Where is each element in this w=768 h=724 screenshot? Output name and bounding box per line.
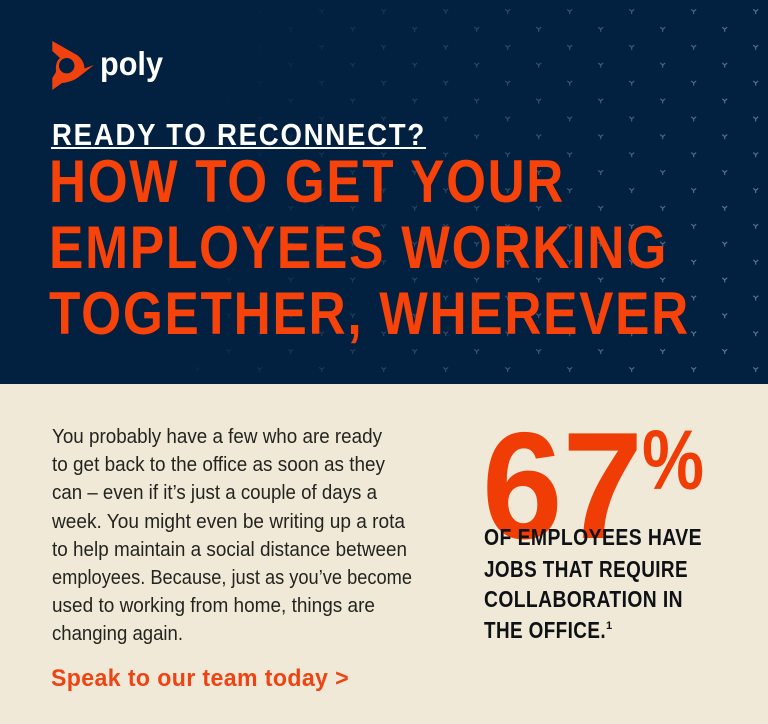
logo wordmark: poly bbox=[100, 45, 164, 82]
statistic: 67%: % bbox=[642, 413, 704, 507]
body paragraph: week. You might even be writing up a rota bbox=[51, 510, 406, 533]
body paragraph bbox=[51, 425, 412, 645]
logo: Poly bbox=[52, 41, 164, 90]
title bbox=[49, 148, 690, 347]
call to action link: Speak to our team today > bbox=[51, 665, 349, 692]
statistic caption: OF EMPLOYEES HAVE bbox=[484, 524, 702, 550]
panel: cream content area bbox=[0, 384, 768, 724]
body paragraph: can – even if it’s just a couple of days a bbox=[52, 481, 378, 504]
body paragraph: to get back to the office as soon as they bbox=[52, 453, 386, 476]
statistic caption: JOBS THAT REQUIRE bbox=[484, 556, 688, 582]
body paragraph: changing again. bbox=[52, 622, 183, 645]
statistic caption: THE OFFICE. bbox=[484, 617, 606, 643]
statistic caption: COLLABORATION IN bbox=[484, 586, 683, 612]
statistic caption bbox=[484, 524, 702, 643]
title: EMPLOYEES WORKING bbox=[49, 214, 668, 281]
body paragraph: used to working from home, things are bbox=[52, 594, 375, 617]
panel: dark navy header bbox=[0, 0, 768, 384]
subtitle: READY TO RECONNECT? bbox=[52, 117, 426, 152]
statistic caption: 1 bbox=[606, 620, 613, 632]
body paragraph: to help maintain a social distance between bbox=[52, 538, 407, 561]
body paragraph: employees. Because, just as you’ve become bbox=[52, 566, 412, 589]
title: HOW TO GET YOUR bbox=[49, 148, 565, 215]
body paragraph: You probably have a few who are ready bbox=[52, 425, 383, 448]
icon: Poly orange propeller mark bbox=[52, 41, 94, 90]
statistic: 67%: 67 bbox=[482, 401, 643, 571]
